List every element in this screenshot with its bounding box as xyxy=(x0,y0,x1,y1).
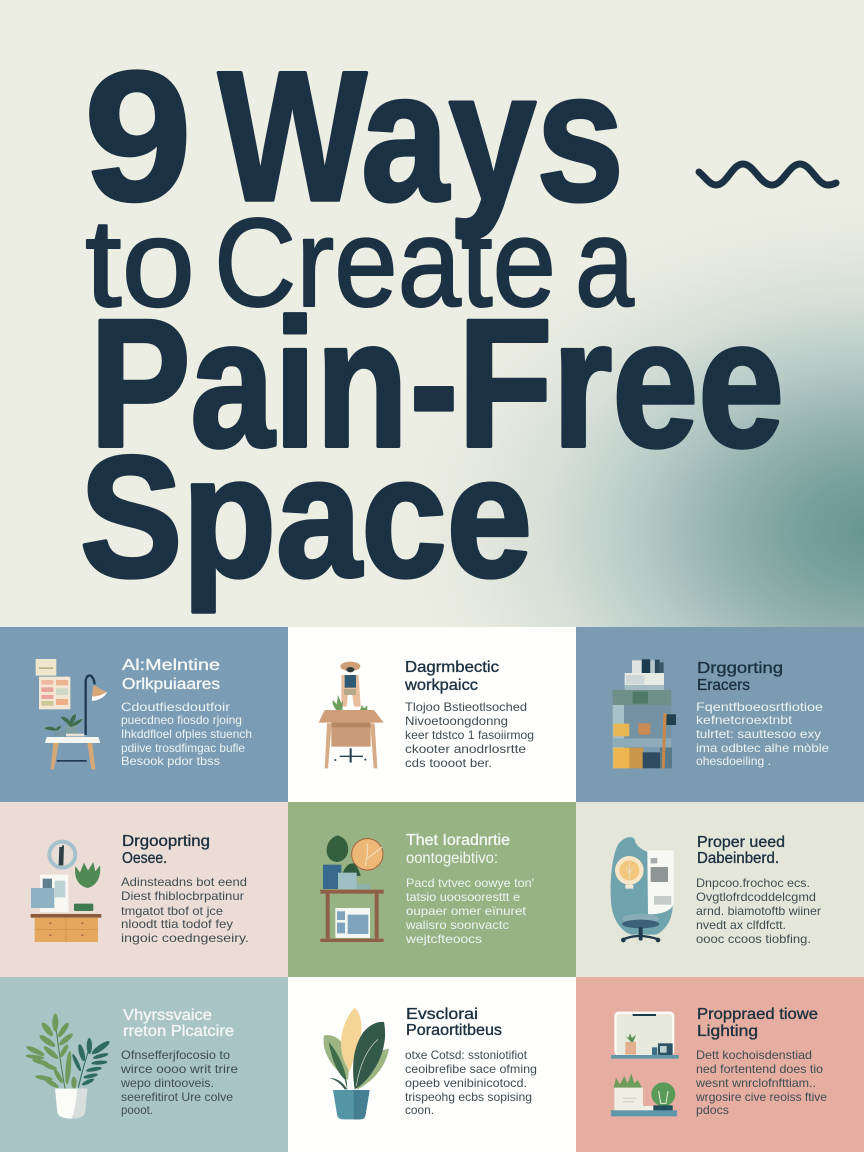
body text: Ihkddfloel ofples stuench xyxy=(121,727,252,741)
icon: shelving with storage boxes xyxy=(613,659,676,768)
heading: Drgooprting xyxy=(122,833,210,850)
title: - xyxy=(410,281,458,485)
body text: Adinsteadns bot eend xyxy=(121,875,247,889)
title: Ways xyxy=(218,34,624,240)
heading: rreton Plcatcire xyxy=(123,1023,234,1040)
icon: shelves with lighting xyxy=(611,1012,679,1116)
body text: arnd. biamotoftb wiiner xyxy=(696,904,821,918)
panel: 9 xyxy=(576,977,864,1152)
body text: pooot. xyxy=(121,1103,153,1117)
title xyxy=(80,34,784,613)
body text xyxy=(121,875,249,945)
body text: pdocs xyxy=(696,1103,729,1117)
body text: Ofnsefferjfocosio to xyxy=(121,1048,230,1062)
body text: tulrtet: sauttesoo exy xyxy=(696,727,821,741)
panel: 8 xyxy=(288,977,576,1152)
body text: Pacd tvtvec oowye ton' xyxy=(406,876,534,890)
body text xyxy=(405,1048,537,1117)
heading xyxy=(406,1006,502,1039)
body text: Diest fhiblocbrpatinur xyxy=(121,889,244,903)
title: to xyxy=(85,194,195,333)
panel: 4 xyxy=(0,802,288,977)
title: Space xyxy=(80,421,532,613)
body text: otxe Cotsd: sstoniotifiot xyxy=(405,1048,528,1062)
heading: Vhyrssvaice xyxy=(123,1007,212,1024)
body text: nloodt ttia todof fey xyxy=(121,917,233,931)
heading xyxy=(697,834,785,867)
icon: ergonomic chair with document xyxy=(611,837,674,942)
icon: dresser with mirror and plant xyxy=(31,840,101,942)
heading: Dagrmbectic xyxy=(405,659,499,676)
title: Pain xyxy=(90,281,408,485)
heading: Drggorting xyxy=(697,660,783,677)
body text: tatsio uoosooresttt e xyxy=(406,890,520,904)
icon: shelf with clock and plants xyxy=(320,835,384,942)
body text: Besook pdor tbss xyxy=(121,754,220,768)
heading: Orlkpuiaares xyxy=(122,676,220,693)
heading: Al:Melntine xyxy=(122,657,220,674)
heading xyxy=(406,832,510,867)
heading: oontogeibtivo: xyxy=(406,850,498,867)
body text: ohesdoeiling . xyxy=(696,754,771,768)
panel: 2 xyxy=(288,627,576,802)
body text: wepo dintooveis. xyxy=(120,1076,214,1090)
panel: 6 xyxy=(576,802,864,977)
title: a xyxy=(575,194,634,333)
heading: Oesee. xyxy=(122,850,167,867)
body text: ceoibrefibe sace ofming xyxy=(405,1062,537,1076)
body text xyxy=(405,700,534,770)
body text: Dett kochoisdenstiad xyxy=(696,1048,812,1062)
body text: cds toooot ber. xyxy=(405,756,492,770)
body text xyxy=(405,876,534,946)
icon: desk with lamp xyxy=(36,659,107,769)
body text: wejtcfteoocs xyxy=(405,932,482,946)
body text: Tlojoo Bstieotlsoched xyxy=(405,700,527,714)
heading xyxy=(697,660,783,694)
body text: nvedt ax clfdfctt. xyxy=(696,918,786,932)
body text: Fqentfboeosrtfiotioe xyxy=(696,700,824,714)
heading xyxy=(122,657,220,693)
heading: Evsclorai xyxy=(406,1006,478,1023)
heading: Thet Ioradnrtie xyxy=(406,832,510,849)
body text: seerefitirot Ure colve xyxy=(121,1090,233,1104)
body text: Cdoutfiesdoutfoir xyxy=(121,700,230,714)
body text: oooc ccoos tiobfing. xyxy=(696,932,811,946)
icon: ergonomic desk with figure xyxy=(319,662,384,768)
body text: ingoic coedngeseiry. xyxy=(121,931,249,945)
body text: ima odbtec alhe mòble xyxy=(696,741,829,755)
body text: Dnpcoo.frochoc ecs. xyxy=(696,876,810,890)
body text: opeeb venibinicotocd. xyxy=(405,1076,527,1090)
body text: tmgatot tbof ot jce xyxy=(121,904,223,918)
heading: workpaicc xyxy=(404,677,478,694)
panel: 5 xyxy=(288,802,576,977)
heading: Eracers xyxy=(697,677,750,694)
body text xyxy=(696,876,821,946)
body text: keer tdstco 1 fasoiirmog xyxy=(405,728,534,742)
title: 9 xyxy=(84,34,192,240)
heading: Proper ueed xyxy=(697,834,785,851)
body text: walisro soonvactc xyxy=(405,918,509,932)
body text: trispeohg ecbs sopising xyxy=(405,1090,532,1104)
body text: wirce oooo writ trire xyxy=(120,1062,238,1076)
body text: oupaer omer eïnuret xyxy=(406,904,527,918)
heading: Dabeinberd. xyxy=(697,850,779,867)
body text: Ovgtlofrdcoddelcgmd xyxy=(696,890,816,904)
body text: puecdneo fiosdo rjoing xyxy=(121,713,242,727)
heading: Poraortitbeus xyxy=(406,1022,502,1039)
body text xyxy=(121,700,252,768)
heading xyxy=(122,833,210,867)
panel: 7 xyxy=(0,977,288,1152)
heading xyxy=(123,1007,234,1040)
body text: ned fortentend does tio xyxy=(696,1062,823,1076)
panel: 3 xyxy=(576,627,864,802)
panel: 1 xyxy=(0,627,288,802)
body text xyxy=(120,1048,238,1117)
body text: ckooter anodrlosrtte xyxy=(405,742,527,756)
body text: wrgosire cive reoiss ftive xyxy=(695,1090,827,1104)
body text: kefnetcroextnbt xyxy=(696,713,793,727)
body text xyxy=(696,700,829,768)
decorative wave icon xyxy=(699,164,836,185)
icon: fern in white pot xyxy=(25,1014,111,1119)
title: Free xyxy=(458,281,784,485)
heading: Proppraed tiowe xyxy=(697,1006,818,1023)
title: Create xyxy=(214,194,556,333)
body text: wesnt wnrclofnfttiam.. xyxy=(695,1076,816,1090)
body text: Nivoetoongdonng xyxy=(405,714,508,728)
body text: pdiive trosdfimgac bufle xyxy=(121,741,245,755)
body text xyxy=(695,1048,827,1117)
body text: coon. xyxy=(405,1103,434,1117)
heading xyxy=(697,1006,818,1040)
hero background xyxy=(0,0,864,627)
icon: broad-leaf plant in teal pot xyxy=(324,1008,389,1119)
heading: Lighting xyxy=(697,1023,758,1040)
heading xyxy=(404,659,499,694)
